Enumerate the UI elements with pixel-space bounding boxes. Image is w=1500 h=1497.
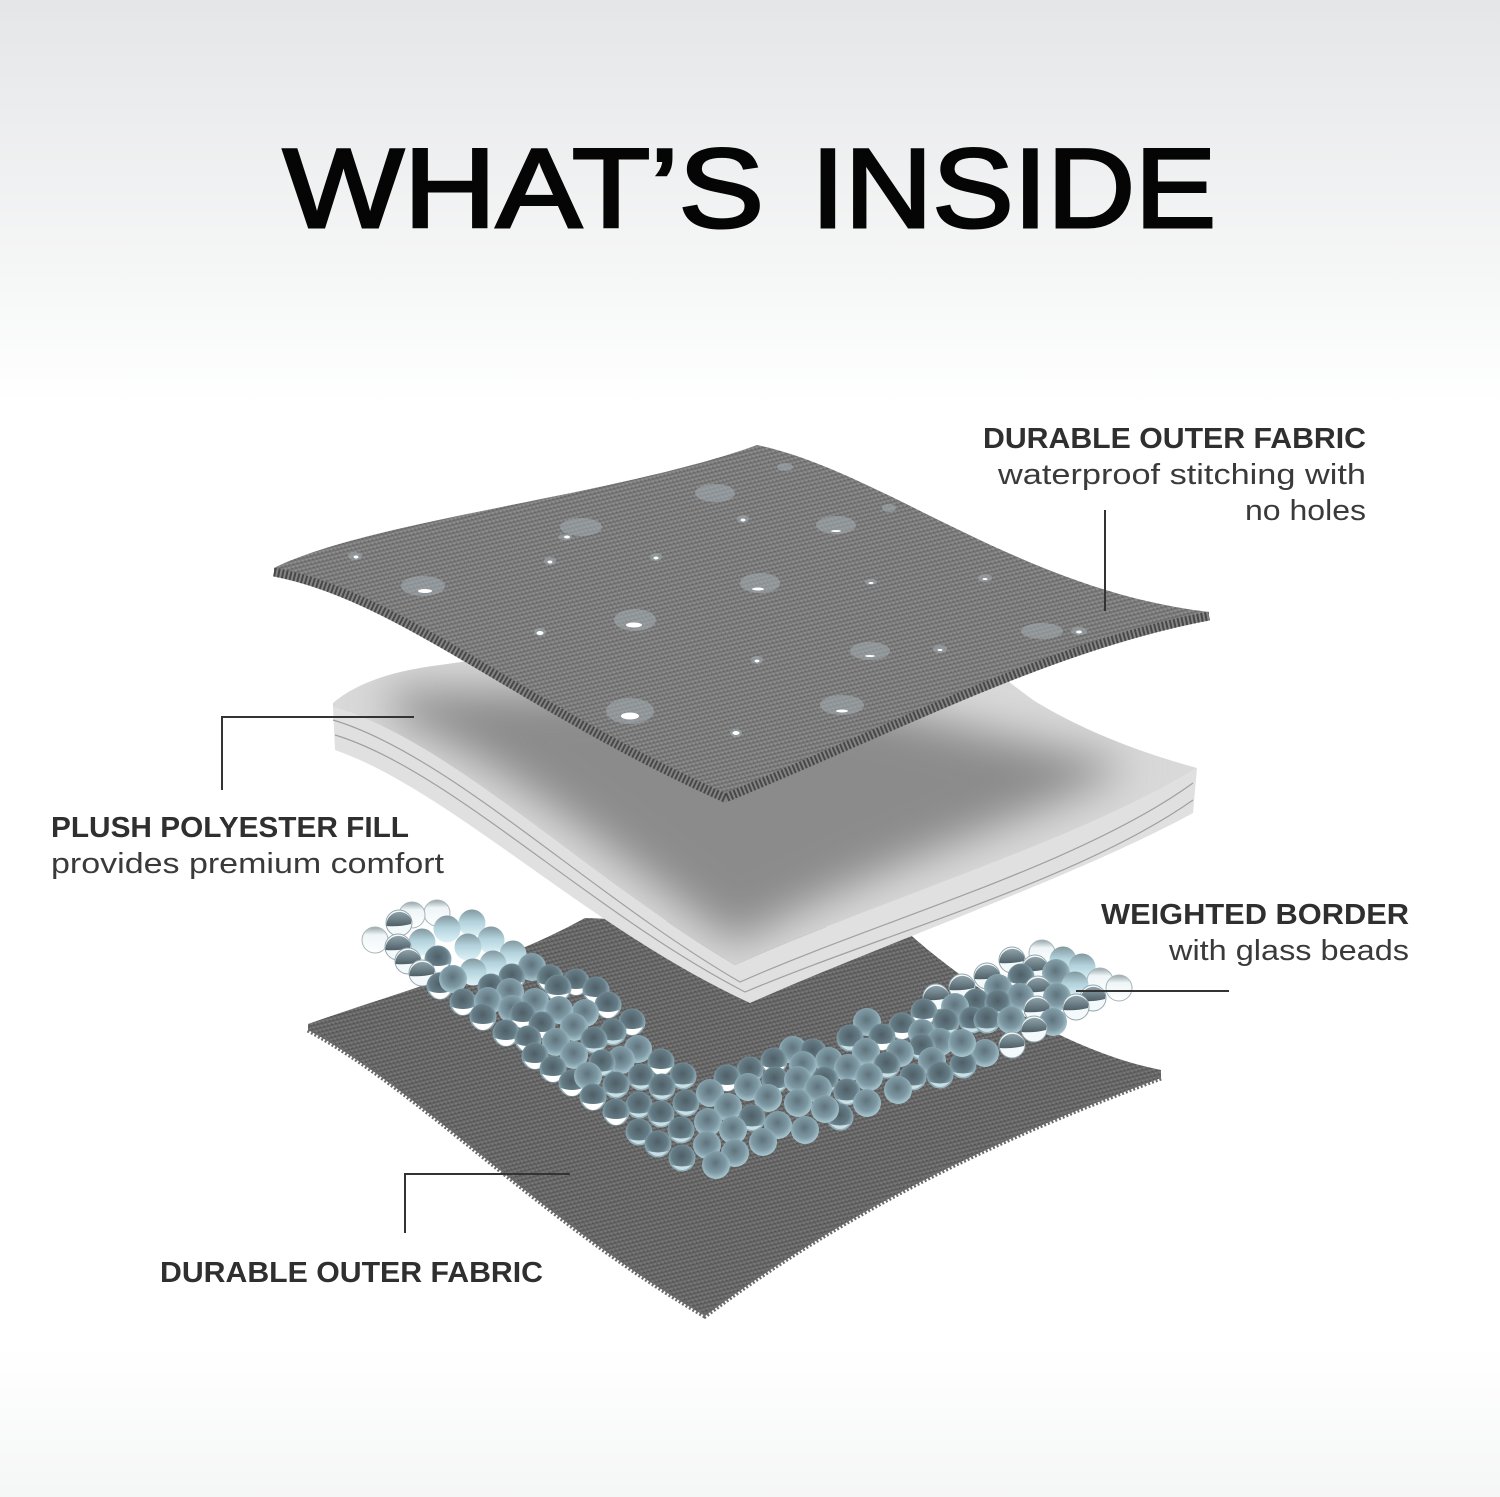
top fabric layer with water droplets bbox=[274, 445, 1209, 802]
title bbox=[283, 126, 1216, 251]
callout: plush polyester fill bbox=[51, 717, 444, 880]
water droplets bbox=[348, 463, 1087, 737]
title: WHAT’S bbox=[283, 126, 764, 251]
title: INSIDE bbox=[811, 126, 1216, 251]
callout: durable outer fabric (top): no holes bbox=[1245, 495, 1366, 527]
callout: durable outer fabric (top): waterproof stitching with bbox=[997, 459, 1366, 491]
fabric edge stripes bbox=[274, 572, 1209, 798]
foam side edge bbox=[333, 707, 1197, 1003]
glass beads bbox=[362, 900, 1132, 1179]
foam seam lines bbox=[333, 720, 1193, 992]
callout: durable outer fabric (top) bbox=[983, 423, 1366, 611]
foam top surface bbox=[333, 662, 1196, 965]
plush polyester fill layer bbox=[332, 662, 1197, 1003]
callout: durable outer fabric (top): DURABLE OUTER FABRIC bbox=[983, 423, 1366, 455]
callout: weighted border: WEIGHTED BORDER bbox=[1101, 899, 1409, 931]
beads: right arm bbox=[693, 940, 1132, 1179]
callout: plush polyester fill: provides premium comfort bbox=[51, 848, 444, 880]
callout: weighted border: with glass beads bbox=[1168, 935, 1409, 967]
callout: weighted border bbox=[1076, 899, 1409, 991]
beads: left arm bbox=[362, 900, 700, 1172]
callout: plush polyester fill: PLUSH POLYESTER FILL bbox=[51, 812, 409, 844]
bottom fabric layer bbox=[308, 918, 1161, 1316]
callout: durable outer fabric (bottom): DURABLE OUTER FABRIC bbox=[160, 1257, 543, 1289]
callout: durable outer fabric (bottom) bbox=[160, 1174, 570, 1289]
